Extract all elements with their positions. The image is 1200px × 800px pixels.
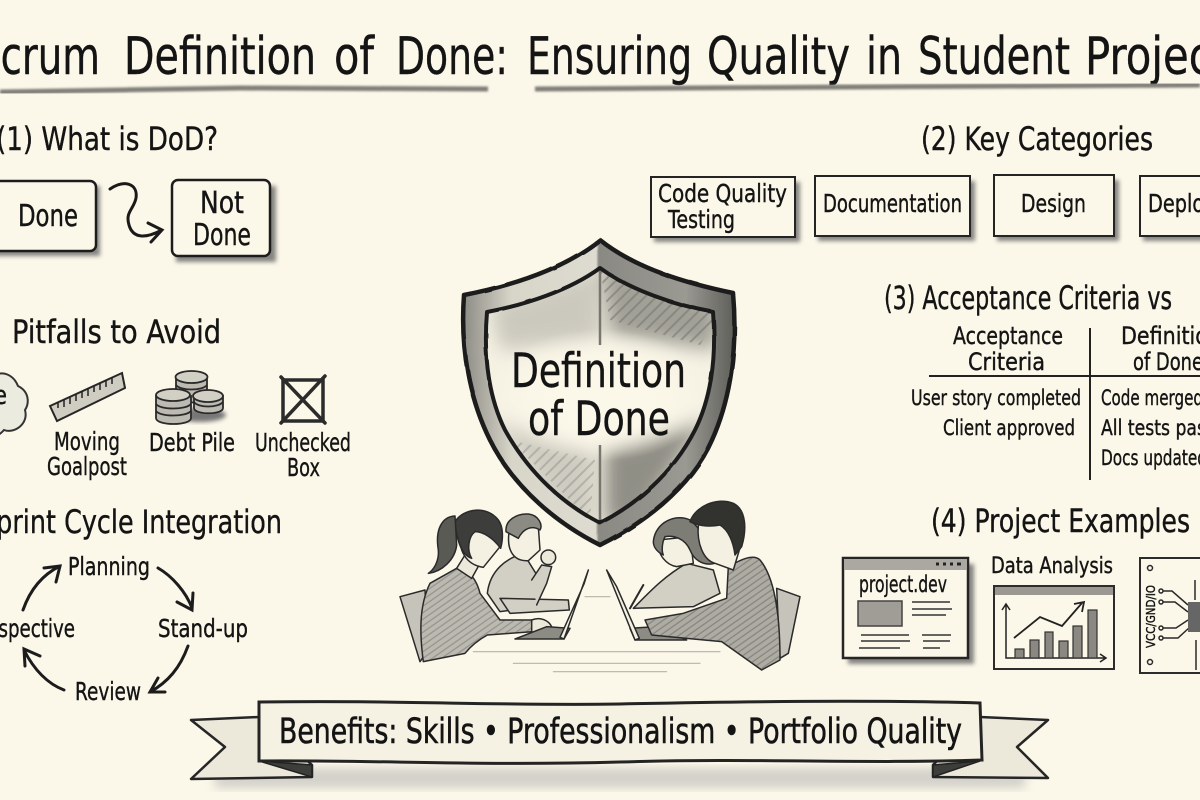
section 4: project examples: [843, 502, 1200, 673]
right chair: [777, 588, 800, 658]
student: man front right: [645, 501, 780, 670]
shield rim: [463, 240, 734, 545]
acceptance criteria rows: User story completed: [911, 386, 1081, 410]
label: moving goalpost: Goalpost: [47, 452, 127, 481]
icon: coin stacks: [156, 371, 226, 424]
box: Done: Done: [18, 199, 78, 234]
icon: circuit board: [1140, 558, 1200, 673]
left laptop: [515, 570, 588, 639]
cycle arrows: [23, 566, 193, 692]
heading 1: (1) What is DoD?: [0, 120, 218, 158]
box: Not Done: [172, 180, 276, 262]
box: deployment: [1140, 176, 1200, 241]
team of students at laptops: [400, 501, 800, 672]
title: in: [866, 27, 902, 87]
section 1: what is DoD: [0, 120, 276, 262]
icon: cloud: [0, 373, 28, 437]
box: code quality testing: Code Quality: [658, 179, 787, 208]
column header: acceptance criteria: Criteria: [968, 348, 1045, 376]
comparison table lines: [929, 328, 1200, 480]
title: Definition: [124, 27, 316, 87]
cycle label: stand-up: Stand-up: [158, 614, 248, 643]
box: Done: [0, 181, 100, 256]
definition of done rows: [1101, 386, 1200, 470]
section 6: sprint cycle: [0, 503, 282, 706]
box: Not Done: Done: [193, 218, 251, 253]
title: Done:: [396, 27, 508, 87]
title underline: [0, 85, 1200, 92]
table: [473, 597, 720, 672]
banner left tail: [191, 717, 312, 779]
acceptance criteria rows: [911, 386, 1081, 440]
column header: acceptance criteria: [953, 322, 1063, 376]
left chair: [400, 590, 428, 662]
acceptance criteria rows: Client approved: [943, 416, 1075, 440]
box: design: Design: [1021, 189, 1086, 218]
box: design: [994, 175, 1119, 241]
shield text: of Done: [528, 392, 670, 447]
box: Not Done: Not: [200, 186, 244, 221]
section 3: acceptance criteria vs DoD: [884, 279, 1200, 480]
shield: definition of done: [463, 240, 734, 545]
title: Quality: [707, 27, 850, 87]
student: woman with ponytail: [421, 510, 552, 662]
icon: web browser window: project.dev: [859, 572, 947, 598]
section 2: key categories: [651, 120, 1200, 242]
section 5: pitfalls: [0, 313, 351, 482]
label: unchecked box: Unchecked: [255, 428, 351, 457]
icon: circuit board: VCC/GND/IO: [1144, 585, 1158, 648]
banner folds: [259, 761, 980, 777]
box: documentation: Documentation: [823, 189, 962, 218]
column header: definition of done: [1121, 322, 1200, 376]
right laptop: [607, 570, 687, 640]
shield text: [511, 344, 686, 447]
box: code quality testing: [651, 177, 800, 242]
column header: acceptance criteria: Acceptance: [953, 322, 1063, 350]
box: code quality testing: Testing: [667, 205, 735, 234]
icon: chart window: [994, 586, 1114, 669]
shield text: Definition: [511, 344, 686, 399]
label: unchecked box: [255, 428, 351, 482]
shield face: [486, 262, 720, 525]
label: moving goalpost: Moving: [54, 427, 120, 456]
box: documentation: [815, 176, 975, 241]
title: [0, 27, 1200, 87]
icon: ruler: [50, 373, 125, 421]
banner right tail: [933, 717, 1048, 778]
title: Student: [918, 27, 1070, 87]
banner main: [259, 701, 982, 763]
label: data analysis: Data Analysis: [991, 554, 1113, 579]
label: debt pile: Debt Pile: [149, 428, 235, 457]
banner shadow: [215, 768, 1025, 788]
cycle label: review: Review: [75, 677, 141, 706]
title: of: [334, 27, 375, 87]
icon: unchecked box: [281, 376, 325, 423]
heading pitfalls: Pitfalls to Avoid: [12, 313, 221, 351]
title: Ensuring: [527, 27, 692, 87]
label: moving goalpost: [47, 427, 127, 481]
student: woman behind right: [630, 518, 720, 608]
cycle label: planning: Planning: [68, 552, 150, 581]
label: unchecked box: Box: [287, 453, 320, 482]
icon: web browser window: [843, 558, 974, 664]
benefits banner: [191, 701, 1048, 788]
banner text: Benefits: Skills • Professionalism • Portfolio Quality: [279, 712, 962, 752]
student: man behind left: [487, 514, 569, 613]
arrow: done to not done: [110, 184, 162, 242]
